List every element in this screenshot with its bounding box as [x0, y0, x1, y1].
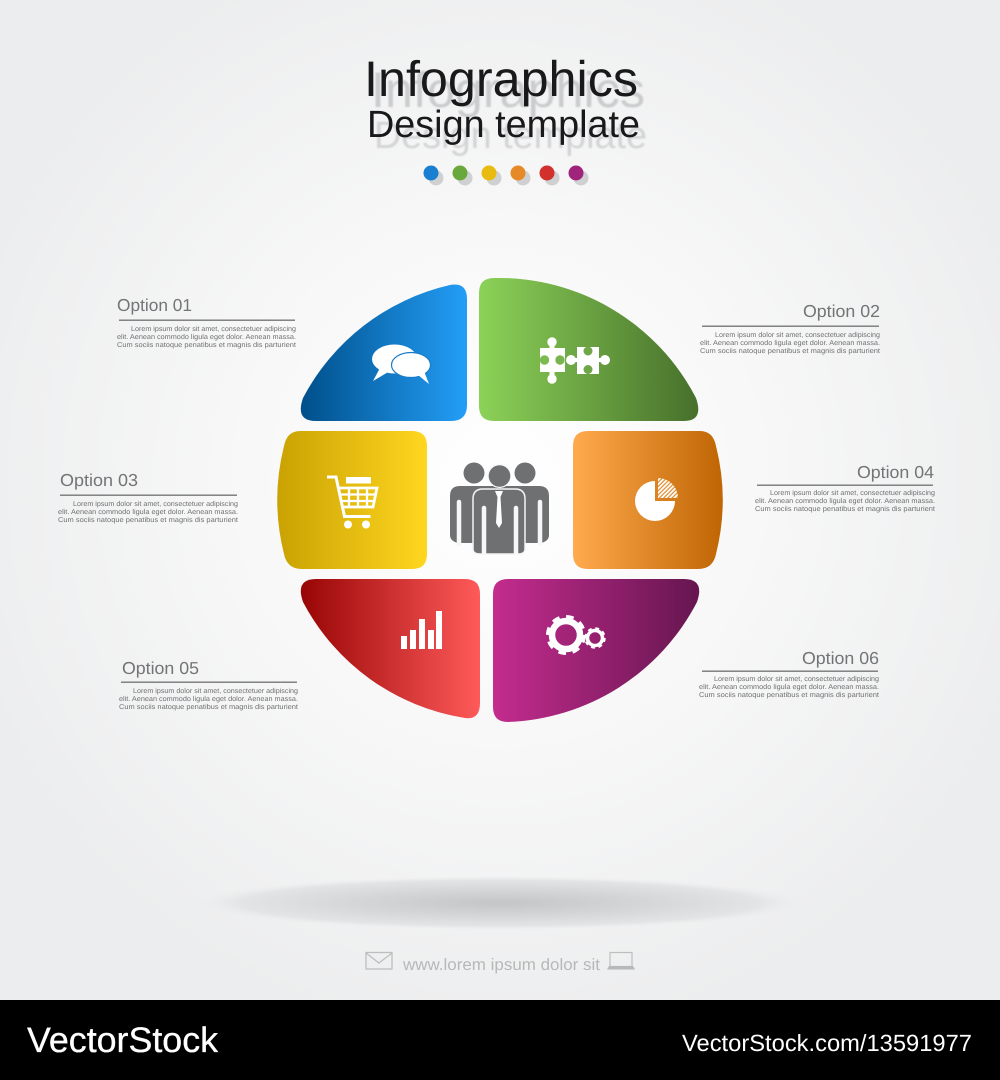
option 06 text: elit. Aenean commodo ligula eget dolor. Aenean massa.	[699, 683, 879, 691]
panel: red segment	[301, 579, 480, 718]
colour dots	[424, 166, 588, 186]
option 02 text: Cum sociis natoque penatibus et magnis dis parturient	[700, 347, 880, 355]
icon: shopping cart	[327, 477, 377, 528]
icon: pie chart	[635, 478, 678, 521]
icon: envelope	[366, 952, 392, 969]
title	[364, 51, 647, 157]
ground shadow	[195, 876, 805, 930]
option 04 text: elit. Aenean commodo ligula eget dolor. Aenean massa.	[755, 497, 935, 505]
option 05 text	[119, 658, 298, 711]
option 02 text	[700, 301, 880, 355]
icon: gears	[548, 617, 604, 653]
option 01 text: Cum sociis natoque penatibus et magnis dis parturient	[117, 341, 296, 349]
option 04 text: Option 04	[857, 462, 934, 482]
option 02 text: Lorem ipsum dolor sit amet, consectetuer adipiscing	[715, 331, 880, 339]
option 06 text: Lorem ipsum dolor sit amet, consectetuer adipiscing	[714, 675, 879, 683]
option 05 text: Option 05	[122, 658, 199, 678]
option 03 text: Option 03	[60, 470, 138, 490]
website text: www.lorem ipsum dolor sit	[402, 956, 600, 974]
icon: bar chart	[401, 611, 442, 649]
option 01 text: Lorem ipsum dolor sit amet, consectetuer adipiscing	[131, 325, 296, 333]
option 02 text: elit. Aenean commodo ligula eget dolor. Aenean massa.	[700, 339, 880, 347]
title: Design template	[374, 115, 647, 157]
option 05 text: elit. Aenean commodo ligula eget dolor. Aenean massa.	[119, 695, 298, 703]
option 03 text: elit. Aenean commodo ligula eget dolor. Aenean massa.	[58, 508, 238, 516]
option 04 text: Cum sociis natoque penatibus et magnis dis parturient	[755, 505, 935, 513]
option 04 text: Lorem ipsum dolor sit amet, consectetuer adipiscing	[770, 489, 935, 497]
option 06 text: Option 06	[802, 648, 879, 668]
option 02 text: Option 02	[803, 301, 880, 321]
icon: laptop	[607, 952, 635, 970]
option 03 text: Cum sociis natoque penatibus et magnis dis parturient	[58, 516, 238, 524]
option 05 text: Cum sociis natoque penatibus et magnis dis parturient	[119, 703, 298, 711]
option 03 text	[58, 470, 238, 524]
option 03 text: Lorem ipsum dolor sit amet, consectetuer adipiscing	[73, 500, 238, 508]
icon: business team	[450, 462, 549, 554]
title: Infographics	[371, 62, 645, 118]
option 06 text: Cum sociis natoque penatibus et magnis dis parturient	[699, 691, 879, 699]
title: Design template	[367, 104, 640, 146]
option 01 text: elit. Aenean commodo ligula eget dolor. Aenean massa.	[117, 333, 296, 341]
option 01 text	[117, 295, 296, 349]
icon: puzzle pieces	[540, 337, 610, 384]
option 01 text: Option 01	[117, 295, 192, 315]
footer url: VectorStock.com/13591977	[682, 1030, 972, 1056]
panel: yellow segment	[277, 431, 427, 569]
option 05 text: Lorem ipsum dolor sit amet, consectetuer adipiscing	[133, 687, 298, 695]
option 04 text	[755, 462, 935, 513]
option 06 text	[699, 648, 879, 699]
footer bar	[0, 1000, 1000, 1080]
panel: orange segment	[573, 431, 723, 569]
icon: chat bubbles	[372, 344, 430, 384]
panel: green segment	[479, 278, 698, 421]
footer brand: VectorStock	[27, 1020, 218, 1060]
title: Infographics	[364, 51, 638, 107]
panel: blue segment	[301, 285, 467, 421]
panel: purple segment	[493, 579, 699, 722]
